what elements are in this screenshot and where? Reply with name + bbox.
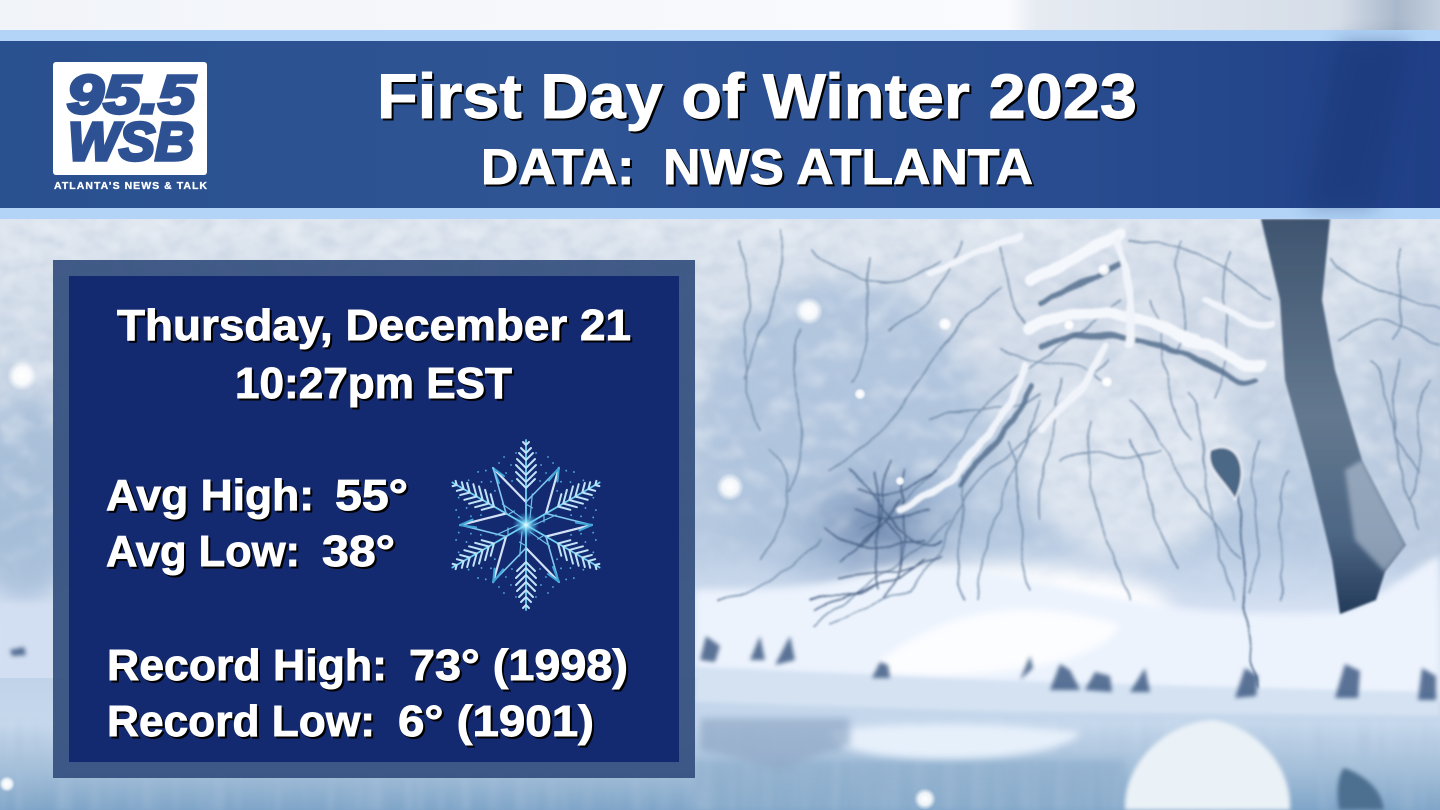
frozen river and reflections (0, 636, 1440, 810)
title: First Day of Winter 2023 (377, 62, 1137, 132)
snow bank (695, 554, 1440, 693)
light blue top stripe (0, 30, 1440, 41)
pale top strip of sky (1025, 0, 1440, 30)
panel outer border (53, 260, 695, 778)
logo frequency: 95.5 (67, 65, 196, 125)
record high: 73° (1998) (409, 641, 628, 690)
record high (107, 641, 628, 690)
misty forest haze (0, 270, 1440, 608)
average high: Avg High: (106, 471, 314, 520)
average low: Avg Low: (106, 527, 300, 576)
ice shelf (695, 677, 1440, 716)
average low (106, 527, 395, 576)
logo call letters: WSB (68, 112, 194, 172)
logo white tile (53, 62, 207, 175)
grass along the bank (10, 636, 1436, 700)
moon reflection (1125, 720, 1290, 810)
record low (107, 697, 594, 746)
light blue bottom stripe (0, 208, 1440, 219)
bare tree branches (720, 230, 1440, 690)
solstice time: 10:27pm EST (235, 359, 512, 408)
record low: Record Low: (107, 697, 375, 746)
header band (0, 30, 1440, 219)
grey reflection (700, 718, 850, 770)
panel: climate data (53, 260, 695, 778)
average low: 38° (322, 527, 395, 576)
panel inner fill (69, 276, 679, 762)
icon: snowflake (436, 440, 616, 610)
faint trunk showing through the banner (1305, 41, 1410, 208)
trunk reflection (1338, 768, 1384, 810)
logo: 95.5 WSB (53, 62, 207, 192)
average high: 55° (335, 471, 408, 520)
large tree trunk (1261, 219, 1406, 614)
record high: Record High: (107, 641, 387, 690)
bright reflection (830, 724, 1080, 759)
subtitle: DATA: NWS ATLANTA (481, 139, 1033, 195)
falling snowflakes (0, 263, 1113, 810)
date line: Thursday, December 21 (117, 301, 631, 350)
record low: 6° (1901) (398, 697, 594, 746)
blue banner (0, 41, 1440, 208)
average high (106, 471, 408, 520)
twig and snow texture in the forest (0, 220, 1440, 560)
logo tagline: ATLANTA’S NEWS & TALK (54, 180, 207, 192)
twisted sapling knot (1209, 447, 1242, 500)
